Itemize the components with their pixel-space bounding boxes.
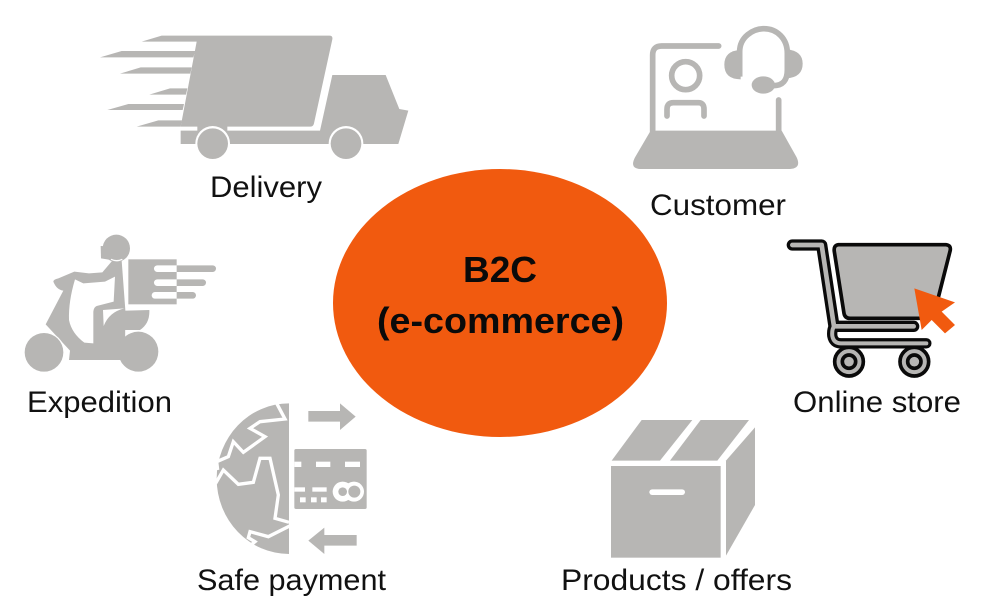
icon: shopping cart with cursor	[792, 245, 955, 376]
label: Expedition: Expedition	[27, 386, 172, 419]
label: Delivery: Delivery	[210, 171, 322, 204]
label: Safe payment: Safe payment	[197, 564, 387, 597]
icon: delivery truck	[100, 36, 408, 161]
icon: scooter courier	[23, 235, 216, 373]
label: Customer: Customer	[650, 189, 786, 222]
central heading	[377, 249, 624, 341]
label: Products / offers: Products / offers	[561, 564, 792, 597]
label: Online store: Online store	[793, 386, 961, 419]
central heading: B2C	[463, 249, 537, 290]
central heading: (e-commerce)	[377, 300, 624, 341]
icon: customer support laptop	[633, 29, 803, 169]
icon: safe payment globe and card	[216, 403, 367, 554]
icon: product box	[611, 420, 755, 558]
central ellipse: B2C (e-commerce)	[333, 169, 667, 437]
